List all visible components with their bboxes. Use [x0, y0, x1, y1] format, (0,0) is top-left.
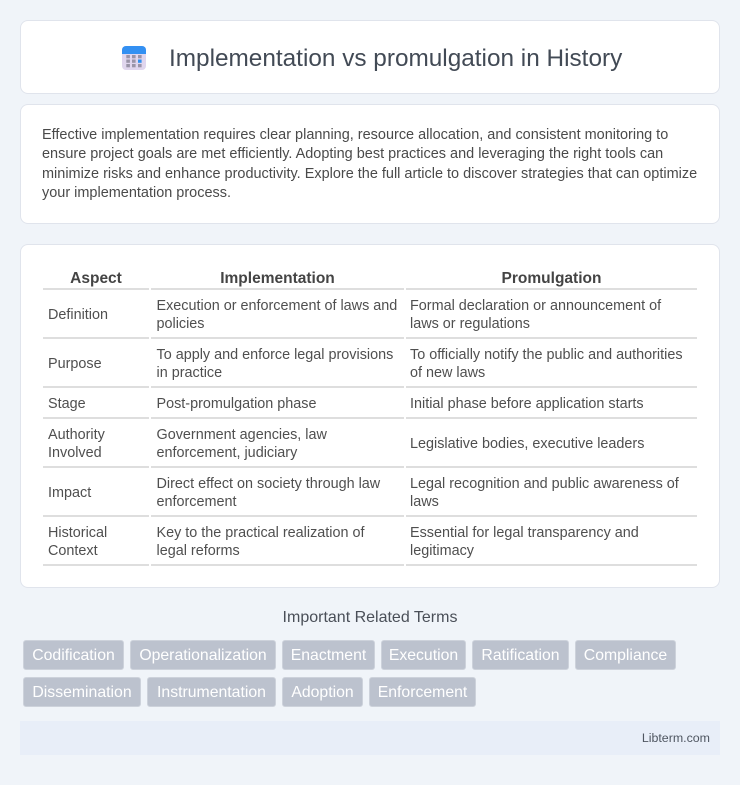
row: purpose [48, 347, 683, 381]
panel: comparison table [20, 244, 720, 588]
row: historical context: legitimacy [410, 543, 474, 559]
related terms tags: Ratification [481, 647, 560, 664]
related terms tags: Instrumentation [157, 684, 266, 701]
related terms tags: Compliance [584, 647, 667, 664]
panel: title header [20, 20, 720, 94]
row: definition: policies [156, 316, 204, 332]
row: purpose: in practice [156, 365, 222, 381]
text block: introduction: your implementation process. [42, 185, 231, 201]
row: authority involved: Authority [48, 427, 105, 443]
row: impact: laws [410, 494, 439, 510]
row: stage: Initial phase before application starts [410, 396, 644, 412]
row: purpose: of new laws [410, 365, 485, 381]
row: authority involved [48, 427, 644, 461]
row: historical context: legal reforms [156, 543, 240, 559]
row: stage [48, 396, 644, 412]
row: definition: Definition [48, 307, 108, 323]
footer credit: Libterm.com [642, 731, 710, 745]
row: stage: Stage [48, 396, 86, 412]
text block: introduction: minimize risks and enhance productivity. Explore the full article to discover strategies that can optimize [42, 166, 697, 182]
row: purpose: Purpose [48, 356, 102, 372]
row: impact [48, 476, 679, 510]
text block: introduction [42, 127, 697, 201]
panel: introduction [20, 104, 720, 224]
related terms tags: Dissemination [32, 684, 132, 701]
row: authority involved: enforcement, judiciary [156, 445, 297, 461]
row: impact: Direct effect on society through law [156, 476, 380, 492]
table header [70, 270, 601, 287]
related terms tags: Codification [32, 647, 115, 664]
row: authority involved: Involved [48, 445, 102, 461]
row: definition: Execution or enforcement of laws and [156, 298, 397, 314]
related terms tags: Enforcement [378, 684, 467, 701]
text block: introduction: Effective implementation requires clear planning, resource allocation, and consistent monitoring to [42, 127, 668, 143]
row: historical context [48, 525, 639, 559]
row: definition [48, 298, 662, 332]
row: definition: laws or regulations [410, 316, 530, 332]
table header: Promulgation [502, 270, 601, 287]
related terms tags: Operationalization [139, 647, 267, 664]
row: definition: Formal declaration or announcement of [410, 298, 661, 314]
table header: Implementation [220, 270, 335, 287]
table header: Aspect [70, 270, 122, 287]
row: historical context: Context [48, 543, 98, 559]
row: purpose: To apply and enforce legal provisions [156, 347, 393, 363]
icon: calendar [122, 46, 146, 70]
row: purpose: To officially notify the public and authorities [410, 347, 683, 363]
text block: introduction: ensure project goals are met efficiently. Adopting best practices and leveraging the right tools can [42, 146, 663, 162]
row: historical context: Essential for legal transparency and [410, 525, 639, 541]
title: Implementation vs promulgation in History [169, 45, 622, 72]
row: historical context: Historical [48, 525, 107, 541]
related terms tags: Enactment [291, 647, 366, 664]
row: authority involved: Legislative bodies, executive leaders [410, 436, 644, 452]
row: historical context: Key to the practical realization of [156, 525, 364, 541]
row: stage: Post-promulgation phase [156, 396, 316, 412]
footer [20, 721, 720, 755]
heading: related terms: Important Related Terms [283, 609, 457, 626]
row: authority involved: Government agencies, law [156, 427, 327, 443]
related terms tags [23, 640, 676, 707]
row: impact: Legal recognition and public awareness of [410, 476, 679, 492]
row: impact: Impact [48, 485, 91, 501]
related terms tags: Execution [389, 647, 458, 664]
related terms tags: Adoption [291, 684, 354, 701]
row: impact: enforcement [156, 494, 236, 510]
